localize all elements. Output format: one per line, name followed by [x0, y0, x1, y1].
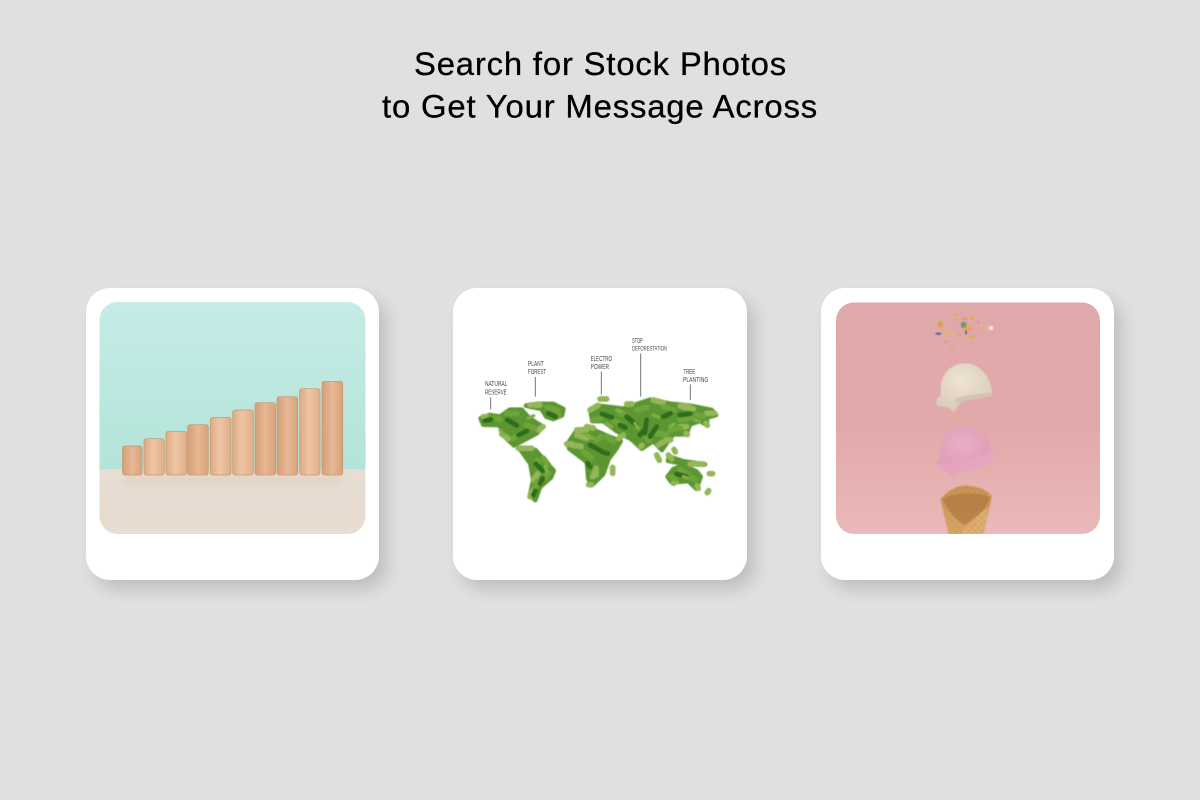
title: Search for Stock Photos	[414, 46, 787, 82]
waffle cone	[940, 486, 992, 534]
leaves: continents	[481, 399, 716, 500]
strawberry scoop	[937, 427, 994, 476]
panel: bar chart photo card	[86, 288, 387, 590]
panel: world map photo card	[453, 288, 755, 590]
photo: wooden pegs rising like a bar chart	[99, 302, 366, 535]
map callout labels: ELECTRO	[591, 356, 612, 363]
title: to Get Your Message Across	[382, 88, 818, 124]
map callout labels: POWER	[591, 364, 609, 371]
map callout labels: RESERVE	[485, 389, 507, 396]
bright highlights	[500, 410, 700, 478]
mid leaves	[490, 407, 703, 488]
photo: ice cream scoops and cone	[836, 302, 1100, 534]
map callout labels: FOREST	[528, 369, 546, 376]
vanilla scoop	[936, 363, 993, 413]
map callout labels: TREE	[683, 369, 695, 376]
dark inner leaves	[485, 413, 690, 495]
panel: ice cream photo card	[821, 288, 1122, 590]
map callout labels: PLANTING	[683, 377, 708, 384]
title	[382, 46, 818, 124]
map callout labels: NATURAL	[485, 381, 507, 388]
sprinkles	[935, 313, 993, 351]
map callout labels: DEFORESTATION	[632, 347, 667, 353]
photo: world map made of leaves	[481, 338, 716, 500]
light outer leaves	[483, 399, 715, 497]
map callout labels: PLANT	[528, 361, 544, 368]
map callout labels: STOP	[632, 338, 643, 345]
map callout labels	[485, 338, 708, 409]
